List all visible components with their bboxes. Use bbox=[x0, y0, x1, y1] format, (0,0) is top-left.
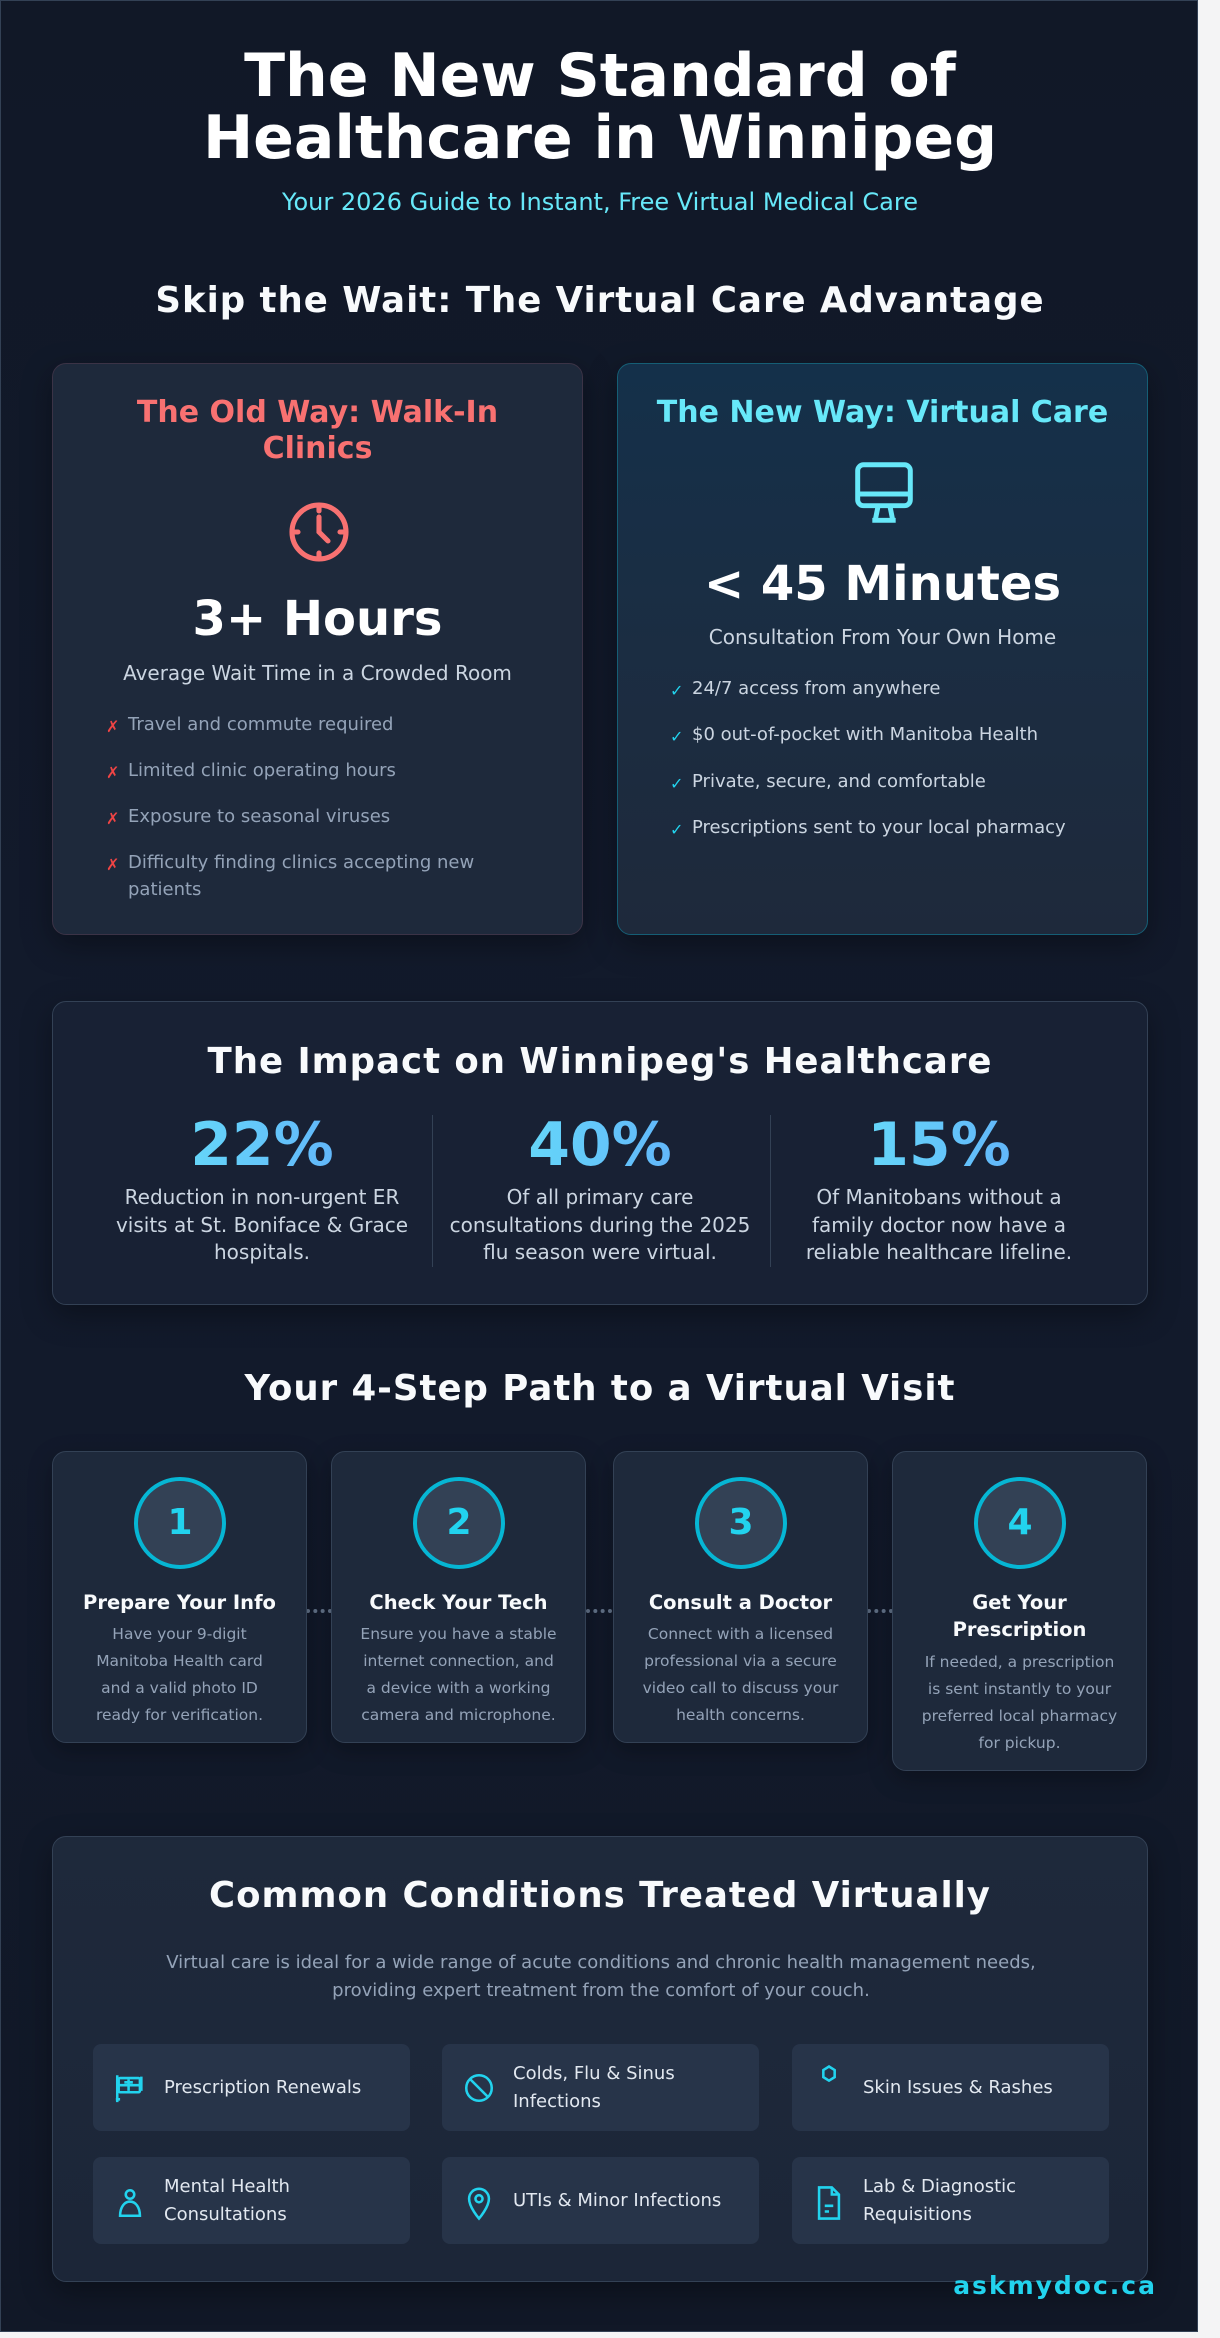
item: mental health: Consultations bbox=[164, 2204, 287, 2224]
item: prescription renewals: Prescription Renewals bbox=[164, 2076, 361, 2098]
conditions intro: Virtual care is ideal for a wide range of acute conditions and chronic health management needs, providing expert treatment from the comfort of your couch. bbox=[166, 1952, 1036, 2001]
list: new way benefits: $0 out-of-pocket with Manitoba Health bbox=[692, 724, 1038, 745]
old way title: Clinics bbox=[263, 431, 372, 466]
panel: old way: ✗ bbox=[106, 809, 119, 828]
step 2: 2 bbox=[446, 1502, 472, 1543]
item: colds flu sinus: Infections bbox=[513, 2090, 601, 2112]
step 4: Prescription bbox=[953, 1618, 1086, 1641]
heading: skip the wait: Skip the Wait: The Virtual Care Advantage bbox=[155, 280, 1045, 321]
heading: 4 steps: Your 4-Step Path to a Virtual Visit bbox=[244, 1368, 956, 1409]
panel: old way: ✗ bbox=[106, 855, 119, 874]
stat: 40%: 40% bbox=[528, 1110, 672, 1180]
panel: impact stats bbox=[52, 1001, 1148, 1305]
item: mental health bbox=[93, 2157, 410, 2244]
panel: old way: ✗ bbox=[106, 717, 119, 736]
item: skin issues: Skin Issues & Rashes bbox=[863, 2076, 1053, 2098]
step 1: 1 bbox=[167, 1502, 193, 1543]
step 3: Consult a Doctor bbox=[649, 1591, 832, 1614]
stat: 3+ hours: 3+ Hours bbox=[193, 591, 442, 647]
panel: old way: ✗ bbox=[106, 763, 119, 782]
step 2: Ensure you have a stable internet connection, and a device with a working camera and microphone. bbox=[360, 1625, 557, 1724]
step 2: Check Your Tech bbox=[369, 1591, 548, 1614]
stat: 22%: 22% bbox=[190, 1110, 334, 1180]
list: old way drawbacks: Difficulty finding clinics accepting new patients bbox=[128, 852, 474, 900]
step 3 bbox=[613, 1451, 868, 1743]
list: new way benefits bbox=[670, 678, 1066, 839]
stat: 40%: flu season were virtual. bbox=[483, 1240, 717, 1264]
step 3: Connect with a licensed professional via a secure video call to discuss your health concerns. bbox=[643, 1625, 838, 1724]
old way title bbox=[137, 395, 498, 466]
stat: 40%: consultations during the 2025 bbox=[450, 1212, 750, 1236]
stat: 15% bbox=[806, 1110, 1072, 1264]
item: prescription renewals bbox=[93, 2044, 410, 2131]
stat: 15%: 15% bbox=[867, 1110, 1011, 1180]
item: mental health: Mental Health bbox=[164, 2176, 290, 2196]
item: skin issues bbox=[792, 2044, 1109, 2131]
item: colds flu sinus: Colds, Flu & Sinus bbox=[513, 2062, 675, 2084]
step 3: 3 bbox=[728, 1502, 754, 1543]
stat: 40% bbox=[450, 1110, 750, 1264]
step 4: If needed, a prescription is sent instantly to your preferred local pharmacy for pickup. bbox=[922, 1653, 1117, 1752]
stat: under 45 minutes: < 45 Minutes bbox=[704, 556, 1061, 612]
subtitle: Your 2026 Guide to Instant, Free Virtual Medical Care bbox=[282, 188, 918, 216]
item: lab requisitions bbox=[792, 2157, 1109, 2244]
new way title: The New Way: Virtual Care bbox=[657, 395, 1108, 430]
step 4: 4 bbox=[1007, 1502, 1033, 1543]
new way subtitle: Consultation From Your Own Home bbox=[709, 625, 1056, 649]
panel: new way: ✓ bbox=[670, 774, 683, 793]
list: old way drawbacks: Travel and commute required bbox=[128, 714, 393, 735]
panel: common conditions bbox=[52, 1836, 1148, 2282]
step 4 bbox=[892, 1451, 1147, 1771]
item: lab requisitions: Lab & Diagnostic bbox=[863, 2176, 1016, 2196]
list: old way drawbacks: Limited clinic operating hours bbox=[128, 760, 396, 781]
step 1: Have your 9-digit Manitoba Health card and a valid photo ID ready for verification. bbox=[96, 1625, 263, 1724]
icon: monitor bbox=[855, 462, 913, 523]
panel: new way: ✓ bbox=[670, 681, 683, 700]
icon: clock bbox=[289, 502, 349, 562]
title: Healthcare in Winnipeg bbox=[203, 103, 997, 173]
item: colds flu sinus bbox=[442, 2044, 759, 2131]
item: UTIs bbox=[442, 2157, 759, 2244]
panel: new way: ✓ bbox=[670, 727, 683, 746]
step 1 bbox=[52, 1451, 307, 1743]
panel: new way: ✓ bbox=[670, 820, 683, 839]
stat: 40%: Of all primary care bbox=[507, 1185, 693, 1209]
item: lab requisitions: Requisitions bbox=[863, 2204, 972, 2224]
list: new way benefits: Prescriptions sent to your local pharmacy bbox=[692, 817, 1066, 838]
step 4: Get Your bbox=[972, 1591, 1067, 1614]
list: new way benefits: 24/7 access from anywhere bbox=[692, 678, 941, 699]
stat: 22%: Reduction in non-urgent ER visits at St. Boniface & Grace hospitals. bbox=[116, 1185, 408, 1264]
conditions heading: Common Conditions Treated Virtually bbox=[209, 1875, 991, 1916]
title: The New Standard of bbox=[244, 41, 956, 111]
list: new way benefits: Private, secure, and comfortable bbox=[692, 771, 986, 792]
panel: old way bbox=[52, 363, 583, 935]
impact heading: The Impact on Winnipeg's Healthcare bbox=[208, 1041, 992, 1082]
list: old way drawbacks: Exposure to seasonal viruses bbox=[128, 806, 390, 827]
panel: new way bbox=[617, 363, 1148, 935]
title bbox=[203, 41, 997, 173]
stat: 22% bbox=[116, 1110, 408, 1264]
old way title: The Old Way: Walk-In bbox=[137, 395, 498, 430]
brand: askmydoc.ca: askmydoc.ca bbox=[953, 2271, 1157, 2300]
step 1: Prepare Your Info bbox=[83, 1591, 276, 1614]
list: old way drawbacks bbox=[106, 714, 474, 900]
old way subtitle: Average Wait Time in a Crowded Room bbox=[123, 661, 512, 685]
step 2 bbox=[331, 1451, 586, 1743]
item: UTIs: UTIs & Minor Infections bbox=[513, 2190, 721, 2210]
stat: 15%: Of Manitobans without a family doctor now have a reliable healthcare lifeline. bbox=[806, 1185, 1072, 1264]
